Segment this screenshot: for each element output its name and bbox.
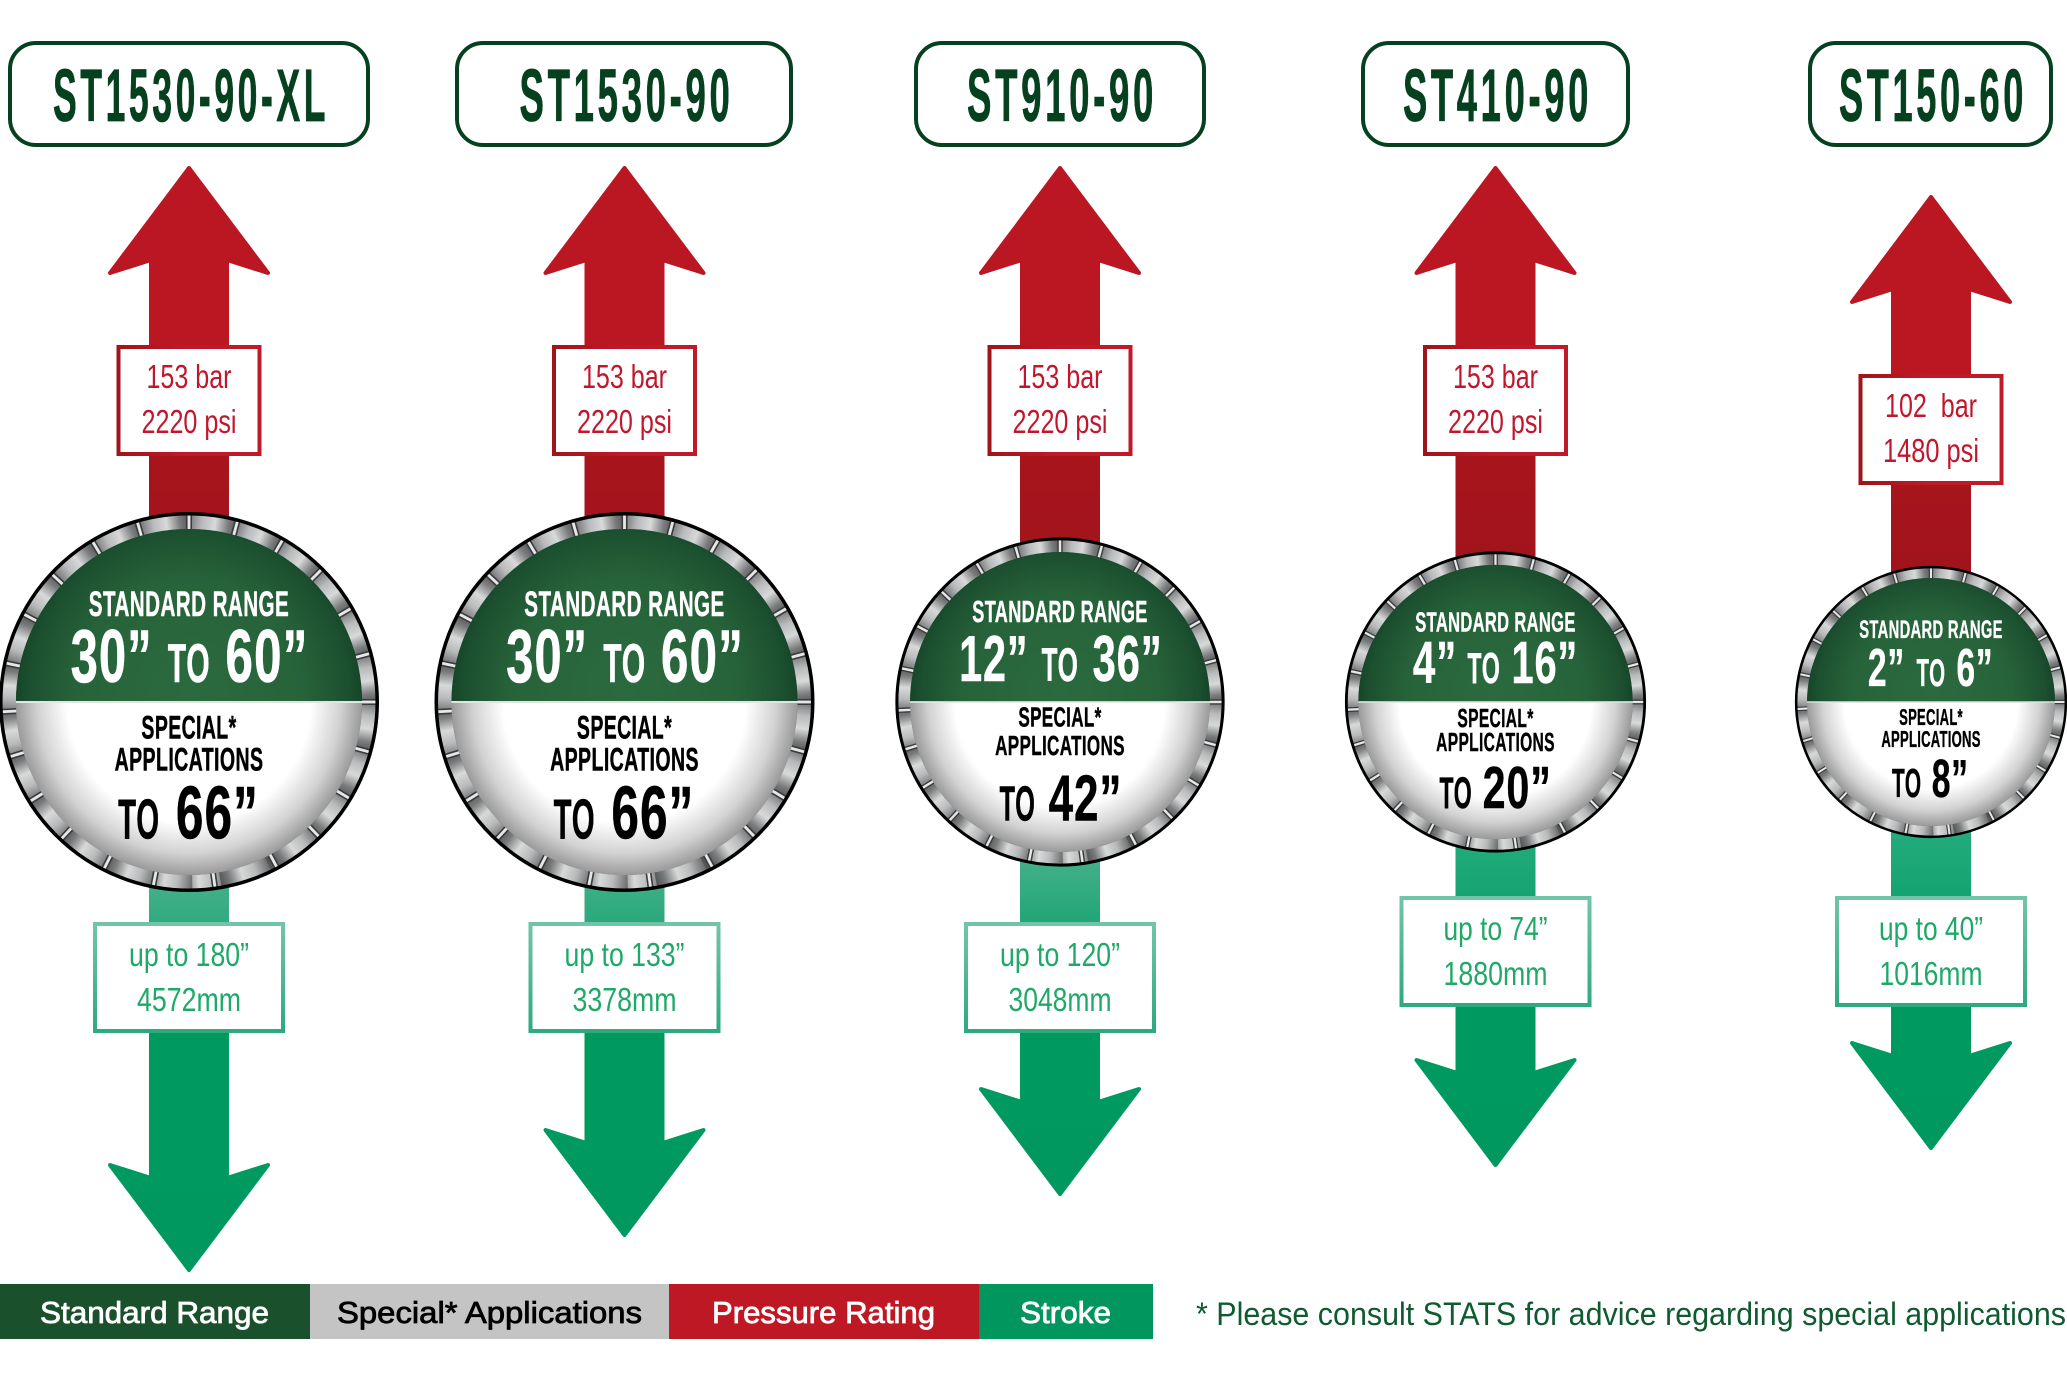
gauge badge: 42” (1049, 761, 1122, 834)
arrow: stroke down (110, 702, 268, 1270)
pressure label: 153 bar (146, 358, 232, 395)
gauge badge: TO (118, 789, 160, 852)
gauge badge: 2” (1868, 638, 1905, 698)
gauge badge: TO (1439, 767, 1472, 818)
arrow: pressure rating up (110, 168, 268, 702)
gauge badge (0, 512, 379, 892)
stroke label: up to 120” (1000, 936, 1120, 973)
gauge badge: STANDARD RANGE (972, 594, 1148, 629)
gauge badge: 6” (1956, 638, 1993, 698)
gauge badge: 4” (1413, 629, 1457, 696)
pressure label (554, 347, 695, 454)
arrow: pressure rating up (546, 168, 704, 702)
arrow: stroke down (981, 702, 1139, 1194)
gauge badge: 66” (611, 771, 694, 855)
pressure label: 153 bar (1453, 358, 1538, 395)
gauge badge (1795, 566, 2067, 838)
gauge badge: 8” (1932, 749, 1969, 809)
pressure label: 2220 psi (577, 403, 672, 440)
legend item: Pressure Rating: Pressure Rating (712, 1295, 935, 1330)
stroke label: 1016mm (1880, 955, 1982, 992)
arrow: stroke down (1416, 702, 1574, 1165)
stroke label (530, 924, 718, 1031)
heading: ST1530-90-XL (10, 43, 368, 145)
legend item: Standard Range (0, 1284, 310, 1339)
gauge badge (435, 512, 815, 892)
pressure label: 2220 psi (142, 403, 236, 440)
arrow: pressure rating up (981, 168, 1139, 702)
column: ST150-60 (1795, 43, 2067, 1148)
stroke label: up to 133” (564, 936, 684, 973)
heading: ST910-90: ST910-90 (967, 54, 1157, 137)
legend item: Stroke: Stroke (1020, 1295, 1111, 1330)
stroke label (95, 924, 283, 1031)
heading: ST1530-90: ST1530-90 (520, 54, 734, 137)
heading: ST150-60 (1810, 43, 2051, 145)
arrow: stroke down (1852, 702, 2010, 1148)
arrow: pressure rating up (1852, 197, 2010, 702)
heading: ST410-90: ST410-90 (1403, 54, 1592, 137)
legend item: Special Applications (310, 1284, 669, 1339)
legend (0, 1284, 1153, 1339)
legend item: Standard Range: Standard Range (40, 1295, 269, 1330)
gauge badge: TO (999, 777, 1035, 831)
pressure label: 2220 psi (1448, 403, 1543, 440)
legend item: Stroke (979, 1284, 1153, 1339)
gauge badge: APPLICATIONS (1436, 729, 1555, 757)
gauge badge: 30” (71, 614, 153, 698)
gauge badge (1345, 551, 1646, 853)
gauge badge: 16” (1512, 629, 1578, 696)
pressure label (118, 347, 260, 454)
gauge badge: SPECIAL* (1457, 705, 1534, 733)
gauge badge: SPECIAL* (577, 709, 672, 745)
pressure label: 1480 psi (1883, 432, 1979, 469)
gauge badge: 60” (661, 614, 744, 698)
arrow: stroke down (546, 702, 704, 1235)
gauge badge: TO (1892, 760, 1922, 806)
column: ST910-90 (895, 43, 1225, 1194)
gauge badge: TO (603, 633, 646, 694)
pressure label: 2220 psi (1012, 403, 1108, 440)
gauge badge: 12” (959, 622, 1028, 695)
gauge badge: STANDARD RANGE (89, 584, 289, 624)
gauge badge: SPECIAL* (1899, 704, 1963, 730)
pressure label: 153 bar (582, 358, 667, 395)
gauge badge: 36” (1092, 622, 1163, 695)
gauge badge: TO (1917, 652, 1946, 695)
pressure label: 153 bar (1018, 358, 1102, 395)
stroke label: 3048mm (1008, 981, 1112, 1018)
heading: ST910-90 (916, 43, 1204, 145)
pressure label: 102 bar (1885, 387, 1977, 424)
gauge badge: 30” (506, 614, 588, 698)
stroke label (1402, 898, 1590, 1005)
gauge badge: APPLICATIONS (1881, 726, 1981, 752)
gauge badge: APPLICATIONS (115, 741, 263, 777)
stroke label: 4572mm (137, 981, 241, 1018)
legend item: Special Applications: Special* Applications (337, 1295, 642, 1330)
stroke label: up to 74” (1444, 910, 1548, 947)
heading: ST1530-90-XL: ST1530-90-XL (53, 54, 329, 137)
gauge badge: SPECIAL* (141, 709, 237, 745)
column: ST410-90 (1345, 43, 1646, 1165)
gauge badge: SPECIAL* (1018, 702, 1102, 733)
pressure label (1425, 347, 1566, 454)
legend item: Pressure Rating (669, 1284, 979, 1339)
gauge badge (895, 537, 1225, 867)
heading: ST1530-90 (457, 43, 791, 145)
gauge badge: TO (1467, 645, 1500, 693)
pressure label (990, 347, 1130, 454)
column: ST1530-90-XL (0, 43, 379, 1270)
stroke label: up to 40” (1879, 910, 1983, 947)
heading: ST410-90 (1363, 43, 1628, 145)
stroke label: up to 180” (129, 936, 249, 973)
gauge badge: 60” (225, 614, 308, 698)
column: ST1530-90 (435, 43, 815, 1235)
stroke label: 1880mm (1444, 955, 1548, 992)
gauge badge: STANDARD RANGE (1415, 606, 1576, 637)
arrow: pressure rating up (1416, 168, 1574, 702)
gauge badge: STANDARD RANGE (524, 584, 725, 624)
stroke label (1837, 898, 2025, 1005)
gauge badge: 20” (1483, 754, 1552, 821)
pressure label (1860, 376, 2002, 483)
gauge badge: APPLICATIONS (995, 730, 1125, 761)
gauge badge: 66” (176, 771, 259, 855)
gauge badge: TO (168, 633, 210, 694)
stroke label: 3378mm (572, 981, 676, 1018)
gauge badge: TO (1042, 639, 1078, 692)
gauge badge: TO (554, 789, 595, 852)
stroke label (966, 924, 1154, 1031)
gauge badge: APPLICATIONS (550, 741, 699, 777)
